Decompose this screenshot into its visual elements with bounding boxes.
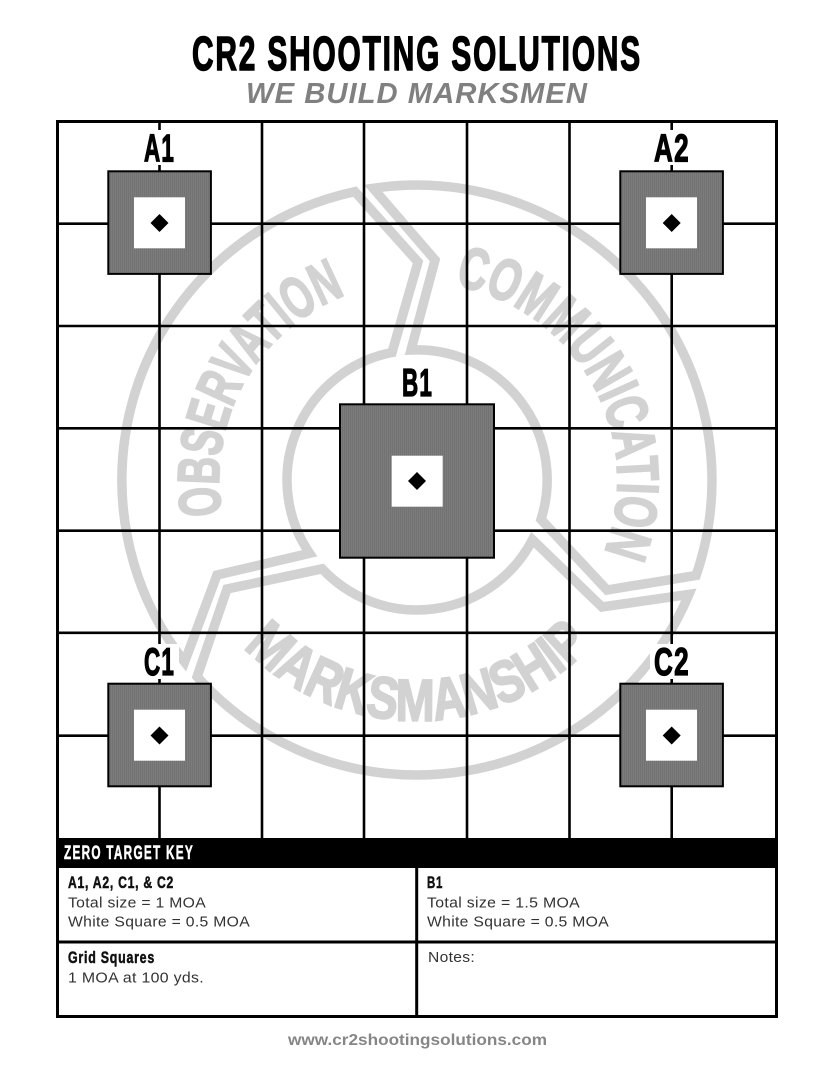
logo: bottom sector outline (197, 540, 689, 775)
key cell: A1 A2 C1 C2: White Square = 0.5 MOA (68, 914, 250, 930)
target A2: A2 (654, 128, 690, 170)
key cell: notes: Notes: (428, 949, 475, 966)
target A1: A1 (144, 128, 175, 170)
target grid (57, 121, 777, 838)
watermark word: observation: OBSERVATION (177, 258, 344, 516)
key header bar (57, 838, 777, 868)
logo: left sector outline (122, 192, 418, 662)
key cell: A1 A2 C1 C2: A1, A2, C1, & C2 (68, 874, 174, 892)
key cell: A1 A2 C1 C2 (68, 874, 250, 930)
target C1: C1 (144, 641, 175, 684)
target A2 (620, 128, 723, 274)
target B1: B1 (402, 362, 433, 405)
watermark logo (117, 180, 717, 780)
target C2: C2 (654, 641, 690, 684)
target A1 (108, 128, 211, 274)
footer website: www.cr2shootingsolutions.com (287, 1032, 547, 1049)
key panel (57, 838, 777, 1017)
key header text: ZERO TARGET KEY (64, 843, 194, 864)
target C1 (108, 641, 211, 786)
key cell: grid squares: 1 MOA at 100 yds. (68, 970, 204, 986)
watermark word: marksmanship: MARKSMANSHIP (244, 618, 577, 722)
key cell: grid squares (68, 949, 204, 986)
key cell: B1: Total size = 1.5 MOA (427, 894, 580, 912)
subtitle: WE BUILD MARKSMEN (246, 78, 588, 110)
key cell: grid squares: Grid Squares (68, 949, 155, 967)
key cell: A1 A2 C1 C2: Total size = 1 MOA (68, 894, 206, 912)
key cell: B1: White Square = 0.5 MOA (427, 914, 609, 930)
logo: right sector outline (373, 185, 712, 590)
watermark word: communication: COMMUNICATION (460, 248, 660, 563)
key cell: B1: B1 (427, 874, 443, 892)
target C2 (620, 641, 723, 786)
outer frame and key dividers (57, 122, 777, 1017)
target B1 (340, 362, 494, 558)
key cell: B1 (427, 874, 609, 930)
